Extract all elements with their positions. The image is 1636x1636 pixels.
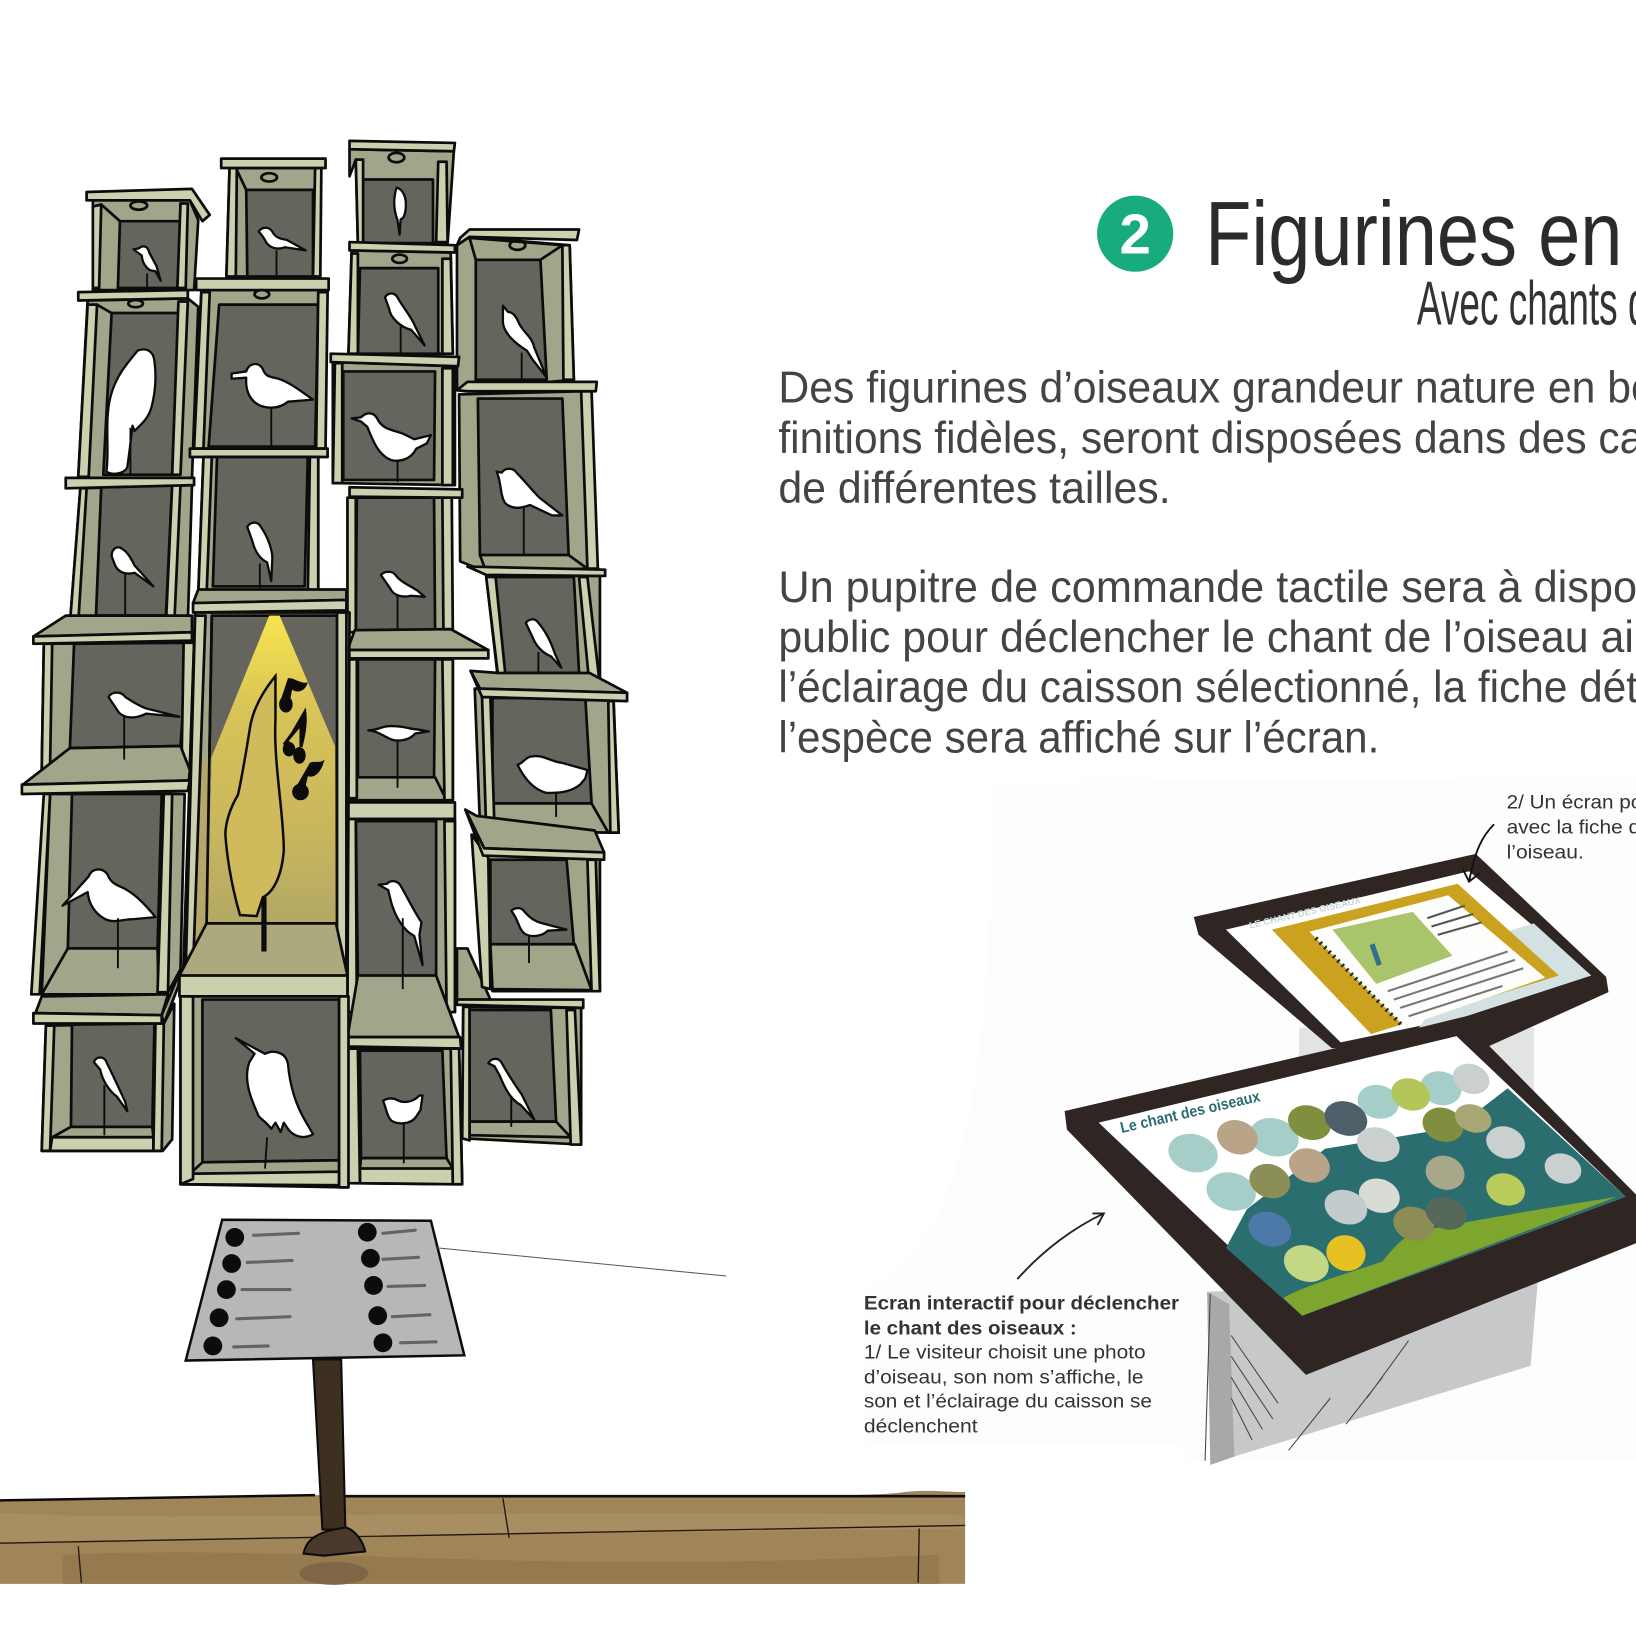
paragraph 2 [778, 561, 1636, 762]
arrow: front screen [1017, 1213, 1104, 1279]
rear screen spiral binding [1316, 938, 1401, 1025]
caption: interactive screen [864, 1292, 1179, 1438]
box: right column third [467, 567, 605, 685]
paragraph 1: de différentes tailles. [778, 462, 1171, 513]
empty ovals [1164, 1067, 1465, 1216]
lectern panel with buttons [186, 1220, 464, 1361]
sketch: paper background [866, 777, 1636, 1461]
box: right column top [457, 230, 579, 390]
box: right column second [457, 382, 598, 572]
music notes [279, 678, 324, 800]
box: centre column second [190, 279, 329, 457]
callout line from lectern [437, 1248, 726, 1276]
box: right column fourth [471, 671, 627, 833]
box: third column sixth [347, 819, 461, 1049]
box: centre column bottom [181, 996, 348, 1187]
rear screen [1196, 856, 1607, 1046]
box: third column bottom [347, 1049, 462, 1184]
rear screen: LE CHANT DES OISEAUX [1248, 894, 1362, 931]
box: centre column third [193, 457, 346, 612]
caption: interactive screen: déclenchent [864, 1416, 978, 1438]
arrow: rear screen [1463, 824, 1494, 882]
box: third column fourth [347, 487, 488, 658]
number badge [1097, 196, 1173, 272]
floor [0, 1491, 965, 1584]
box: left column top [87, 189, 210, 290]
caption: interactive screen: le chant des oiseaux : [864, 1317, 1077, 1339]
caption: rear screen [1507, 792, 1636, 864]
caption: interactive screen: 1/ Le visiteur choisit une photo [864, 1341, 1146, 1363]
box: third column second [348, 242, 455, 354]
number badge: 2 [1120, 203, 1151, 266]
touch lectern [186, 1220, 464, 1585]
box: centre column top [221, 159, 326, 276]
front stand [1205, 1279, 1538, 1465]
light cone [207, 616, 336, 923]
box: third column top [350, 141, 455, 243]
box: left column fifth [31, 794, 185, 994]
lectern pole [313, 1360, 345, 1530]
box: illuminated centre box with singing bird [179, 612, 350, 996]
illustration: wall of bird boxes [22, 141, 627, 1187]
photo ovals [1212, 1059, 1586, 1288]
caption: interactive screen: d’oiseau, son nom s’affiche, le [864, 1367, 1144, 1389]
front screen [1066, 1020, 1636, 1373]
caption: rear screen: 2/ Un écran po [1507, 792, 1636, 814]
lectern shadow [299, 1562, 368, 1585]
lectern base [304, 1527, 365, 1556]
screen heading: Le chant des oiseaux [1119, 1088, 1262, 1137]
box: third column third [331, 354, 459, 485]
box: left column fourth [22, 616, 194, 794]
caption: interactive screen: Ecran interactif pour déclencher [864, 1292, 1179, 1314]
box: left column bottom [33, 970, 181, 1151]
box: left column second [78, 290, 198, 478]
paragraph 2: l’espèce sera affiché sur l’écran. [778, 711, 1379, 762]
caption: rear screen: l’oiseau. [1507, 842, 1584, 864]
caption: rear screen: avec la fiche d [1507, 817, 1636, 839]
box: left column third [66, 478, 194, 625]
paragraph 1 [778, 362, 1636, 513]
sketch: interactive tables [1066, 856, 1636, 1465]
singing bird outline [225, 676, 284, 916]
box: right column bottom [457, 948, 583, 1145]
rear stand [1299, 1028, 1534, 1148]
box: third column fifth [347, 659, 455, 819]
caption: interactive screen: son et l’éclairage du caisson se [864, 1391, 1152, 1413]
box: right column fifth [465, 810, 604, 991]
